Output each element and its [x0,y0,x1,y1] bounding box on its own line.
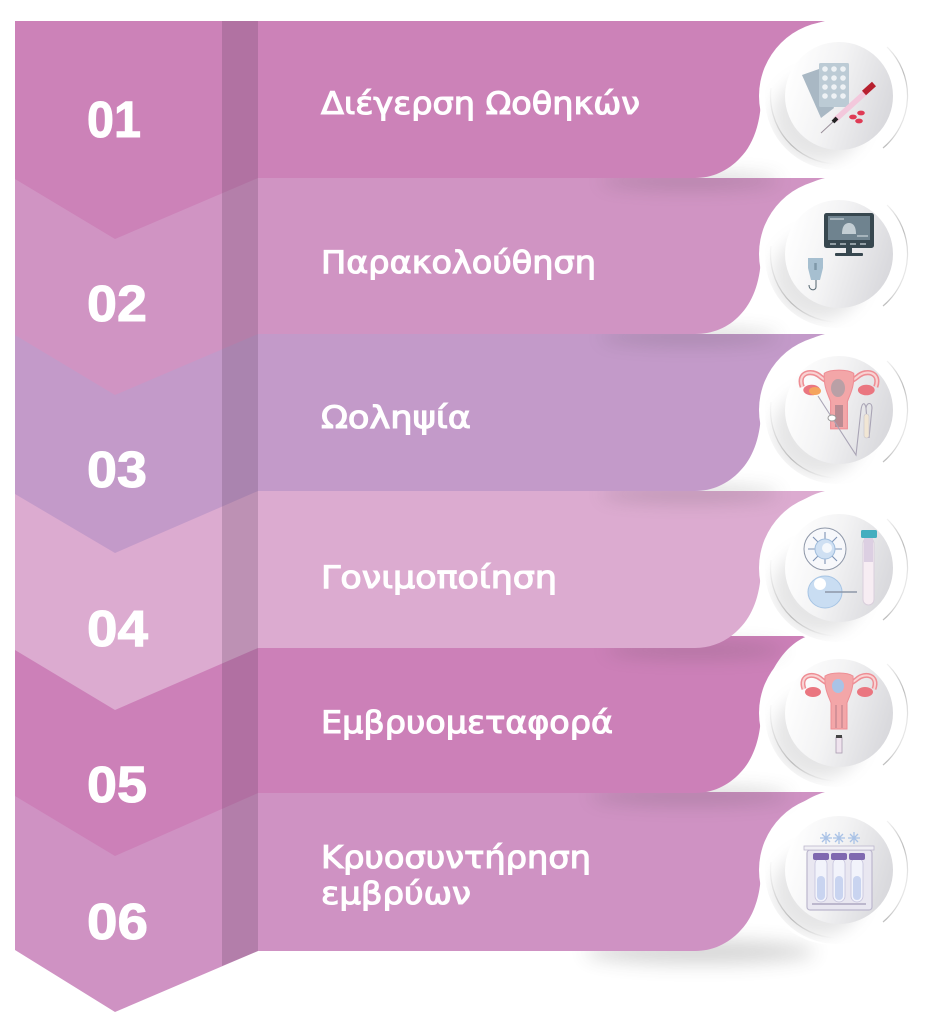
panel: step 01 [15,21,909,239]
label 06 [321,840,591,912]
number 01: 01 [87,91,141,148]
icon: frozen tubes [759,795,909,945]
number 04: 04 [87,600,149,657]
icon: embryo transfer [759,638,909,788]
number 05: 05 [87,756,147,813]
band 06 [15,780,825,1012]
label 04: Γονιμοποίηση [321,560,557,596]
panel: step 06 [15,780,909,1012]
number 02: 02 [87,275,147,332]
band 05 [15,630,808,856]
label 01: Διέγερση Ωοθηκών [321,86,640,122]
number 06: 06 [87,893,148,950]
label 02: Παρακολούθηση [321,245,596,281]
band 03 [15,320,825,553]
label 05: Εμβρυομεταφορά [321,705,613,741]
panel: step 04 [15,480,909,710]
label 06: εμβρύων [321,876,471,912]
panel: step 03 [15,320,909,553]
label 03: Ωοληψία [321,400,471,436]
icon: fertilisation [759,493,909,643]
band 04 [15,480,825,710]
number 03: 03 [87,441,147,498]
label 06: Κρυοσυντήρηση [321,840,591,876]
icon: egg retrieval [759,335,909,485]
band 01 [15,21,825,239]
icon: pills and syringe [759,21,909,171]
panel: step 05 [15,630,909,856]
panel: step 02 [15,170,909,395]
band 02 [15,170,825,395]
icon: ultrasound [759,179,909,329]
vertical strip [222,21,258,966]
